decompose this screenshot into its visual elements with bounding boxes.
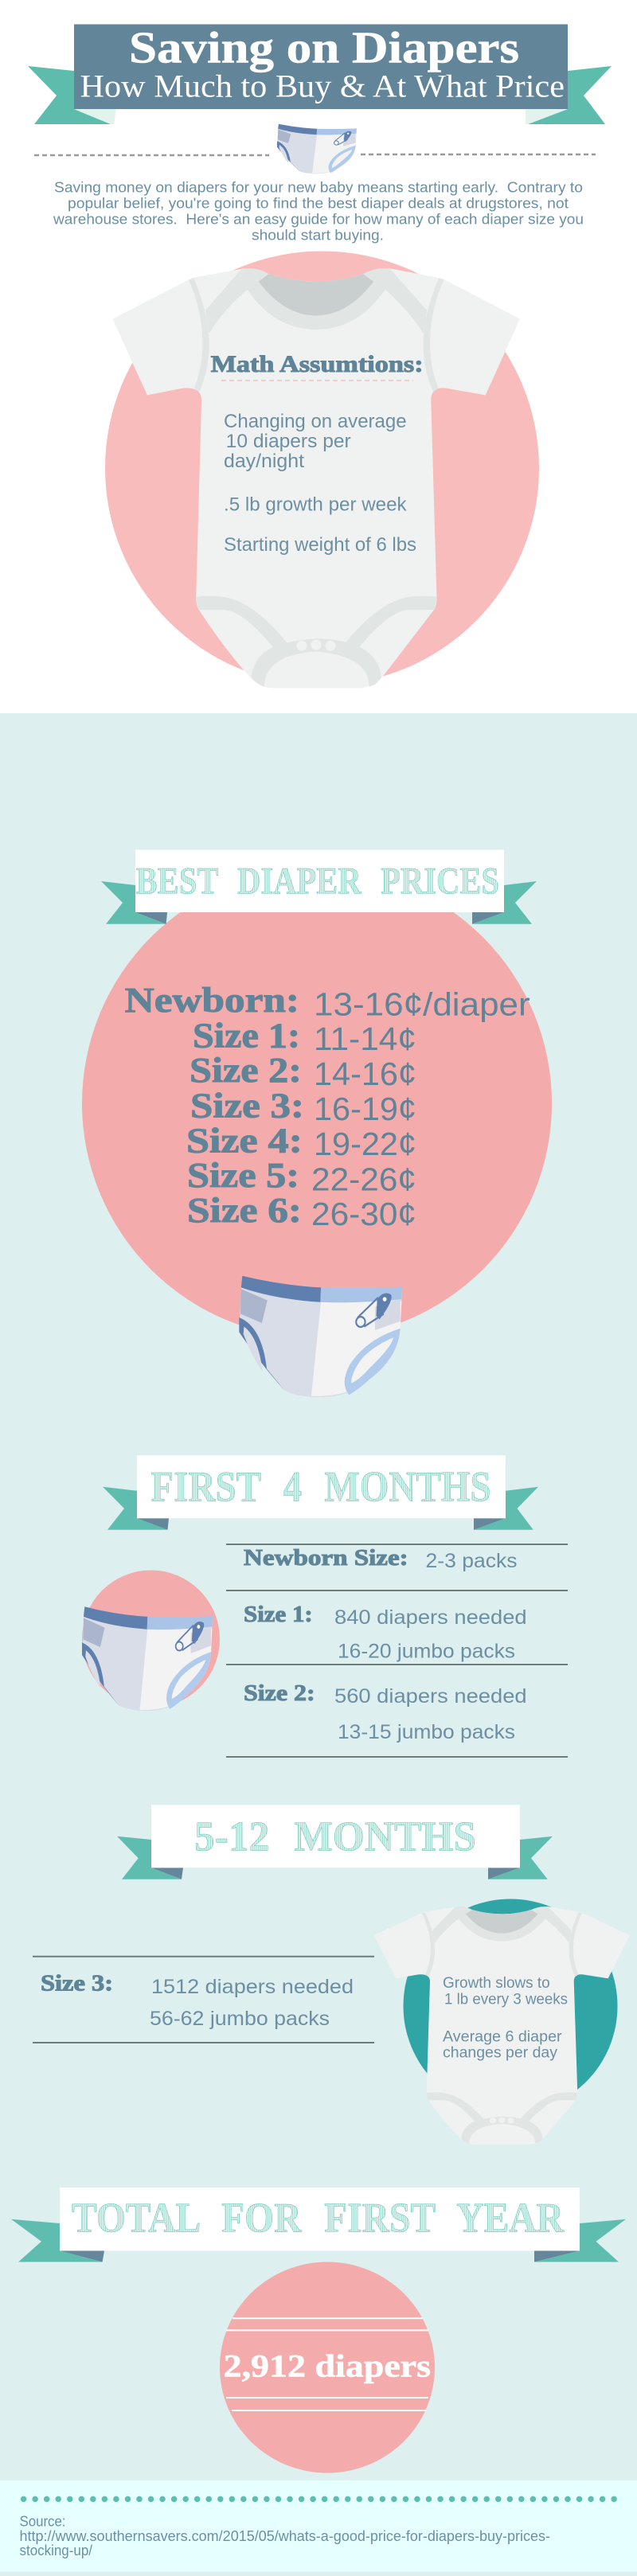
row: size 3: 1512 diapers needed (151, 1976, 354, 1998)
main title banner (28, 23, 612, 124)
row: size 1 (244, 1602, 527, 1663)
price labels (125, 981, 304, 1230)
total figure: 2,912 diapers (224, 2348, 431, 2384)
icon: diaper (82, 1606, 213, 1711)
intro paragraph: Saving money on diapers for your new baby means starting early. Contrary to (54, 180, 583, 196)
ribbon tails (117, 1836, 553, 1879)
heading: math assumptions: Math Assumtions: (211, 351, 424, 377)
row: newborn size: 2-3 packs (425, 1550, 518, 1572)
growth note: changes per day (443, 2044, 557, 2061)
panel: footer source (0, 2480, 637, 2572)
row: size 1: Size 1: (244, 1602, 313, 1627)
price labels: Newborn: (125, 981, 299, 1020)
row: size 1: 840 diapers needed (334, 1606, 527, 1629)
price values: 22-26¢ (311, 1161, 416, 1197)
heading: FIRST 4 MONTHS (150, 1463, 491, 1511)
price values (311, 986, 530, 1232)
row: size 2: Size 2: (244, 1681, 315, 1706)
growth note: Growth slows to (443, 1975, 550, 1992)
source text (19, 2514, 550, 2558)
assumptions list: Changing on average (224, 411, 407, 432)
source text: Source: (19, 2514, 65, 2530)
growth note (443, 1975, 568, 2061)
title plate (74, 24, 568, 109)
row: size 1: 16-20 jumbo packs (338, 1641, 515, 1663)
heading: BEST DIAPER PRICES (136, 861, 499, 903)
footer background (0, 2480, 637, 2572)
assumptions list: 10 diapers per (226, 431, 351, 452)
price labels: Size 6: (187, 1191, 302, 1230)
row: newborn size (244, 1546, 518, 1572)
pink circle (220, 2262, 435, 2473)
price labels: Size 2: (190, 1051, 302, 1090)
panel: best diaper prices (82, 850, 552, 1397)
intro paragraph: should start buying. (252, 228, 384, 244)
row: size 3: 56-62 jumbo packs (150, 2008, 330, 2030)
row: size 3: Size 3: (41, 1972, 113, 1996)
icon: large diaper (239, 1276, 402, 1397)
price values: 16-19¢ (314, 1091, 416, 1127)
row: size 2 (244, 1681, 527, 1743)
growth note: Average 6 diaper (443, 2028, 562, 2045)
price values: 11-14¢ (314, 1021, 416, 1057)
heading: TOTAL FOR FIRST YEAR (72, 2195, 565, 2241)
row: size 2: 13-15 jumbo packs (338, 1721, 515, 1743)
ribbon tails: title (28, 66, 612, 124)
price labels: Size 1: (193, 1016, 300, 1056)
heading plate (60, 2188, 580, 2250)
title text: Saving on Diapers (129, 23, 519, 72)
price values: 13-16¢/diaper (314, 986, 530, 1022)
ribbon tails (101, 881, 537, 924)
heading plate (135, 850, 504, 912)
heading plate (151, 1805, 520, 1868)
assumptions list: day/night (224, 451, 304, 472)
intro paragraph: popular belief, you're going to find the best diaper deals at drugstores, not (68, 196, 569, 212)
icon: onesie (112, 268, 520, 688)
growth note: 1 lb every 3 weeks (444, 1992, 568, 2008)
row: size 2: 560 diapers needed (334, 1685, 527, 1708)
source text: stocking-up/ (19, 2543, 92, 2558)
assumptions list: .5 lb growth per week (224, 494, 408, 516)
assumptions list (224, 411, 416, 556)
price labels: Size 5: (187, 1156, 299, 1195)
heading: 5-12 MONTHS (194, 1813, 476, 1860)
panel: 5-12 months (33, 1805, 630, 2145)
intro paragraph (53, 180, 584, 244)
pink circle (105, 252, 539, 685)
price labels: Size 4: (186, 1122, 303, 1161)
divider left (34, 154, 269, 156)
source text: http://www.southernsavers.com/2015/05/whats-a-good-price-for-diapers-buy-prices- (19, 2528, 550, 2544)
price values: 26-30¢ (311, 1196, 416, 1232)
panel: math assumptions (105, 252, 539, 688)
price values: 19-22¢ (314, 1126, 416, 1162)
ribbon tails (11, 2219, 626, 2262)
teal circle (403, 1899, 618, 2113)
intro paragraph: warehouse stores. Here's an easy guide for how many of each diaper size you (53, 212, 584, 228)
panel: total for first year (11, 2188, 626, 2473)
panel: first 4 months (82, 1455, 568, 1757)
price values: 14-16¢ (314, 1056, 416, 1092)
subtitle text: How Much to Buy & At What Price (80, 68, 565, 104)
price labels: Size 3: (190, 1087, 304, 1126)
row: size 3 (41, 1972, 354, 2030)
heading plate (137, 1455, 506, 1518)
pink circle (82, 1570, 220, 1708)
icon: small diaper (277, 124, 357, 174)
icon: small onesie (374, 1907, 630, 2145)
ribbon tails (103, 1487, 538, 1530)
divider right (361, 154, 596, 155)
row: newborn size: Newborn Size: (244, 1546, 408, 1571)
pink circle (82, 868, 552, 1338)
assumptions list: Starting weight of 6 lbs (224, 534, 416, 556)
section background: pale teal lower area (0, 713, 637, 2576)
